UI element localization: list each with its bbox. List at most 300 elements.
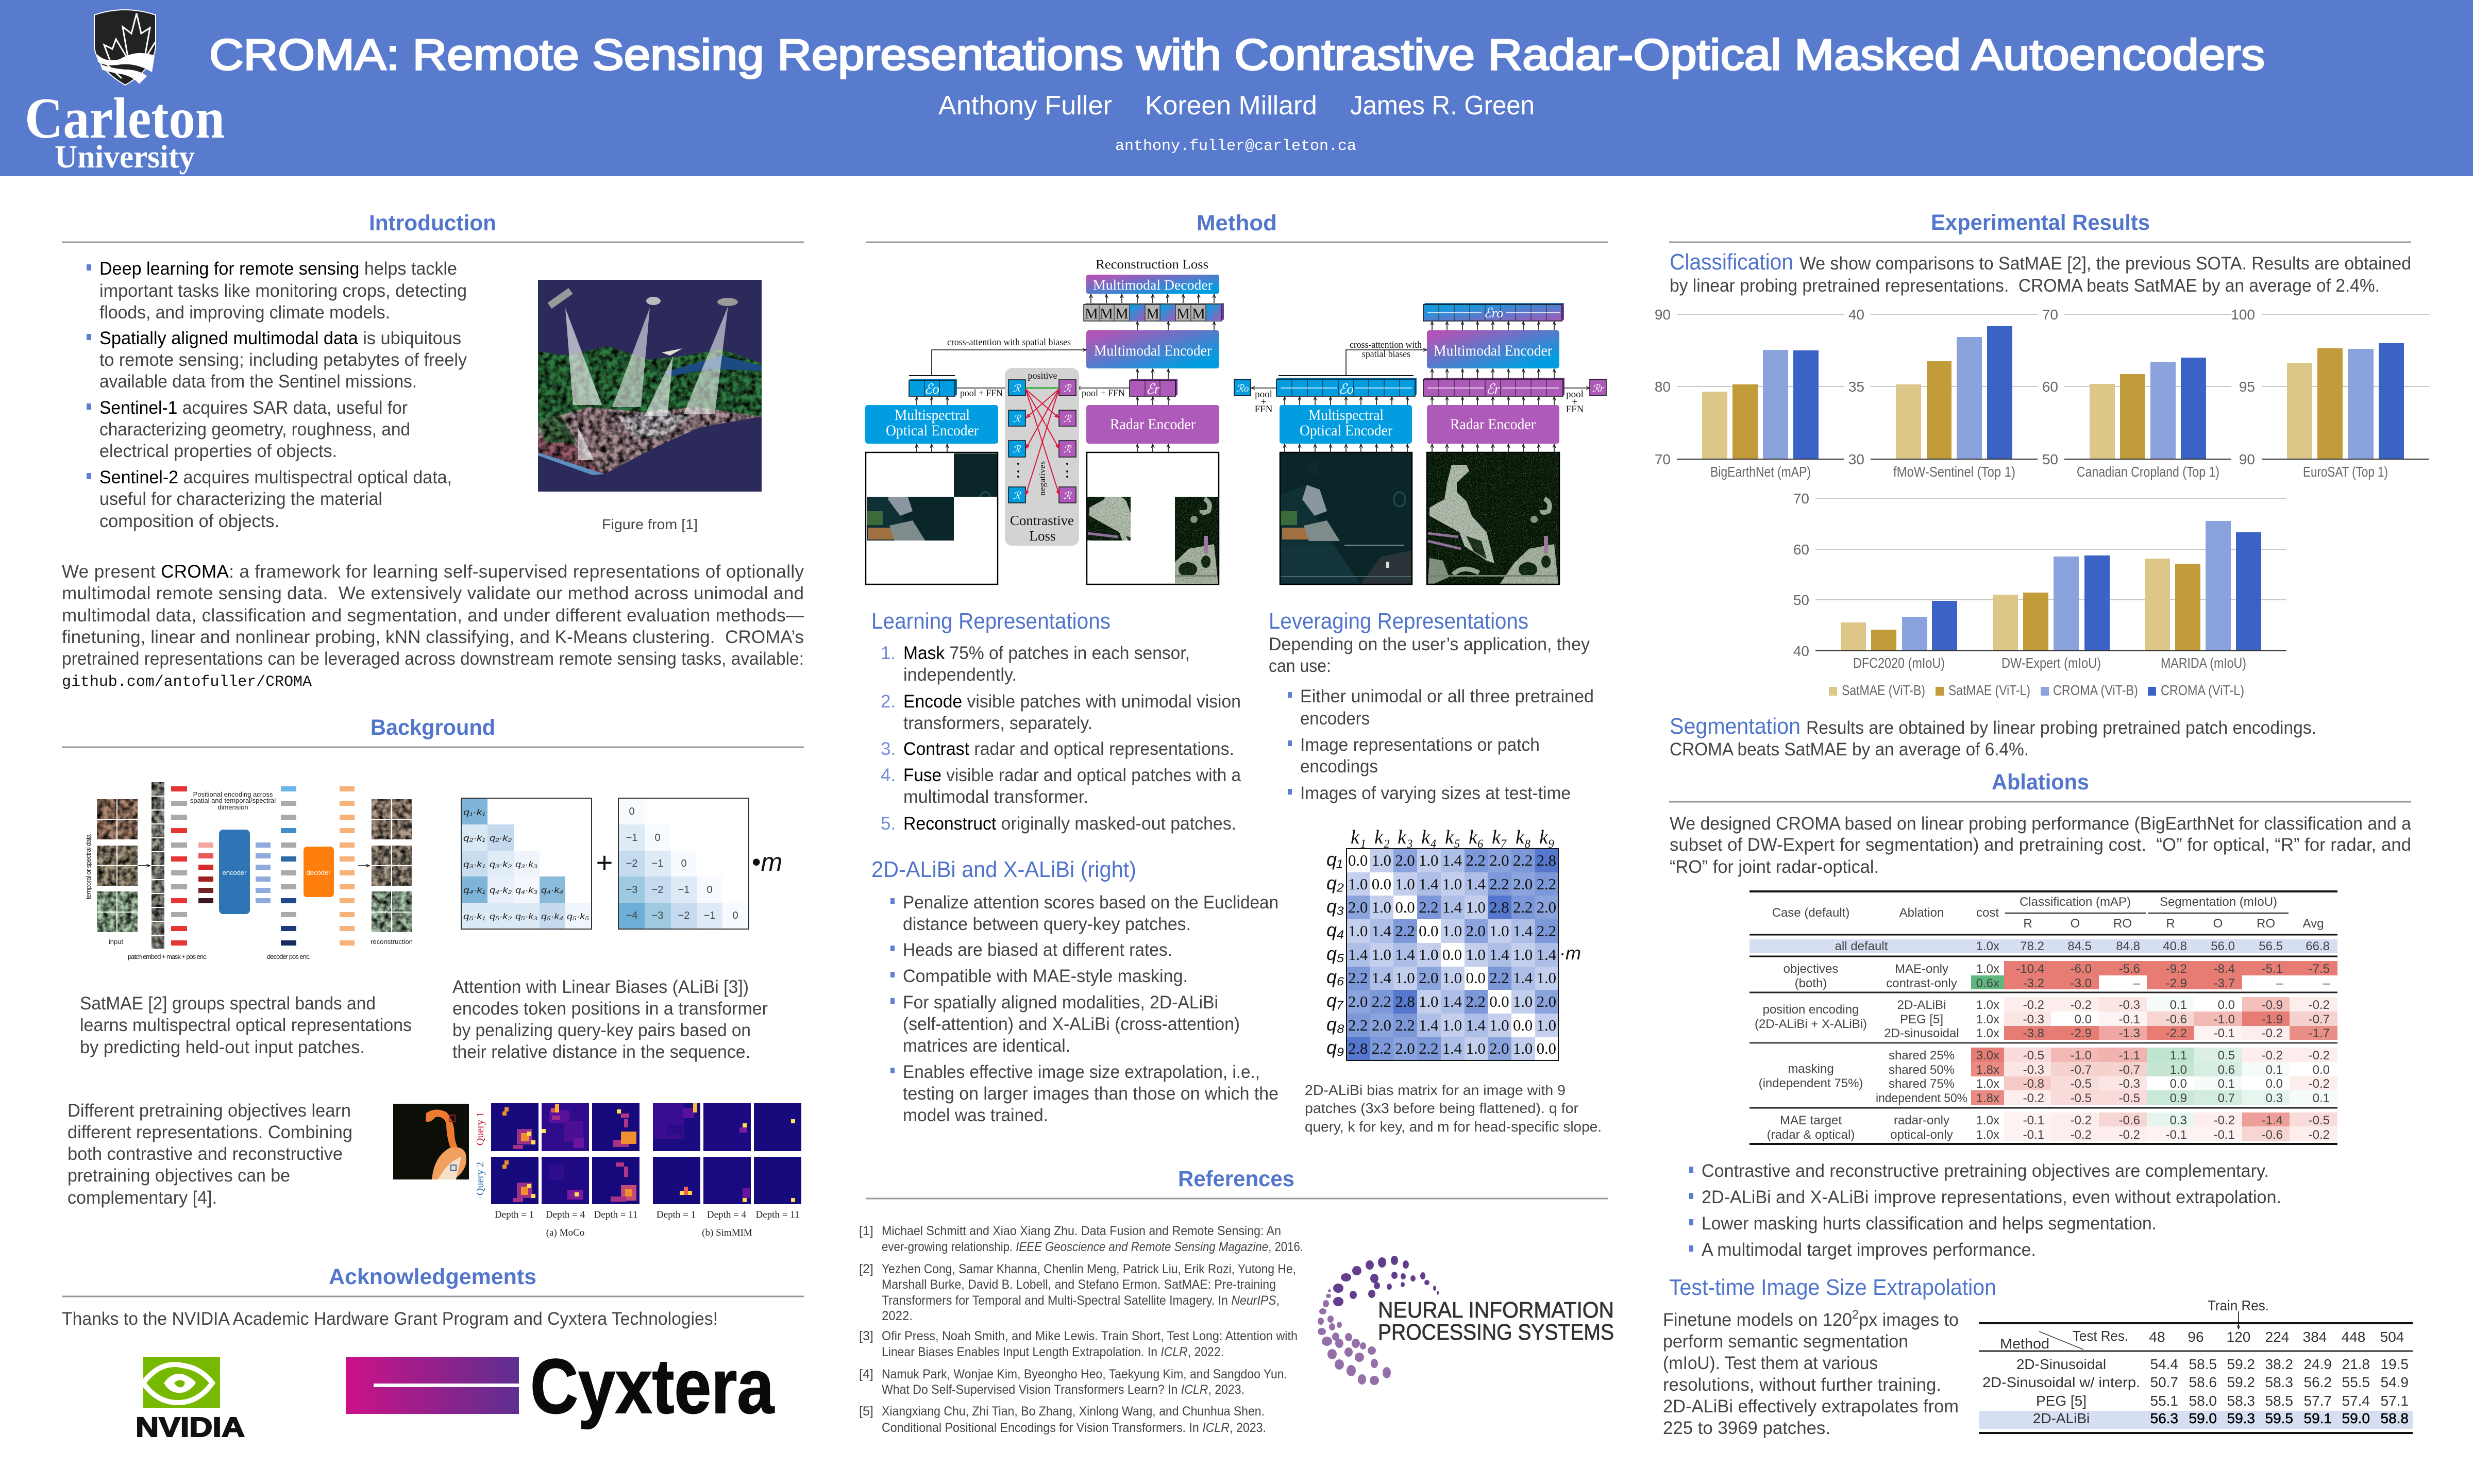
matrix: 2D-ALiBi bias: q₁	[1326, 849, 1342, 870]
text: pretraining objectives: both contrastive and reconstructive	[68, 1144, 343, 1164]
rows: objectives: -7.5	[2309, 962, 2330, 976]
figure: SatMAE architecture: patch embed + mask + pos enc.	[128, 953, 208, 960]
image: flamingo	[393, 1104, 469, 1179]
tokens: masked sequence: M	[1100, 306, 1113, 322]
table: image size extrapolation: 504	[2380, 1329, 2404, 1345]
bullet list: intro: available data from the Sentinel missions.	[99, 372, 417, 392]
chart: fMoW-Sentinel: fMoW-Sentinel (Top 1)	[1893, 464, 2015, 480]
table header: Classification (mAP)	[2020, 895, 2131, 909]
caption: bias matrix: 2D-ALiBi bias matrix for an image with 9	[1305, 1082, 1566, 1098]
numbered list: Fuse visible radar and optical patches with a	[903, 765, 1241, 785]
heading: Acknowledgements: Acknowledgements	[329, 1264, 536, 1289]
table: image size extrapolation: 57.4	[2342, 1393, 2370, 1409]
connector: cross attention right	[1346, 350, 1427, 376]
table: image size extrapolation: 59.0	[2342, 1410, 2370, 1426]
rows: masking: 0.1	[2266, 1063, 2283, 1077]
figure: SatMAE architecture: temporal or spectral data	[85, 834, 92, 899]
matrix: query key scores: q₁·k₁	[463, 807, 485, 817]
bullet list: leveraging: Images of varying sizes at test-time	[1300, 783, 1571, 803]
rows: MAE target: -1.4	[2262, 1114, 2283, 1127]
row: all default	[1749, 939, 2337, 956]
matrix: 2D-ALiBi bias: 2.0 2.2 2.8 1.0 1.4 2.2 0.0 1.0 2.0	[1348, 992, 1556, 1010]
chart: BigEarthNet: 90	[1655, 307, 1671, 323]
bullet list: intro: composition of objects.	[99, 511, 279, 531]
rows: position encoding: -0.3	[2023, 1013, 2044, 1026]
reference list: Michael Schmitt and Xiao Xiang Zhu. Data Fusion and Remote Sensing: An	[882, 1224, 1281, 1238]
heading: learning representations: Learning Representations	[871, 609, 1111, 634]
rows: position encoding: -2.9	[2071, 1026, 2092, 1040]
box: multimodal decoder: Multimodal Decoder	[1093, 277, 1213, 293]
rows: position encoding: -3.8	[2023, 1026, 2044, 1040]
box: multispectral encoder left	[865, 405, 998, 444]
table: image size extrapolation: 50.7	[2150, 1374, 2178, 1390]
token: R_R output	[1590, 379, 1606, 396]
matrix: relative distance: −1	[678, 884, 689, 896]
label: cross attention right	[1350, 340, 1422, 360]
table header: RO	[2257, 917, 2275, 931]
panel: references	[859, 1167, 1614, 1435]
bullet list: ALiBi	[890, 892, 1278, 1125]
box: multispectral encoder right: Multispectral	[1308, 407, 1384, 424]
bullet list: intro: to remote sensing; including petabytes of freely	[99, 350, 467, 370]
text: ALiBi description: their relative distance in the sequence.	[452, 1042, 750, 1062]
header banner	[0, 0, 2473, 176]
text: segmentation: Segmentation	[1670, 714, 1801, 739]
matrix: query key scores: q₂·k₂	[490, 833, 512, 843]
image: full optical	[1280, 452, 1412, 584]
bullet list: intro: Sentinel-2 acquires multispectral optical data,	[99, 467, 452, 487]
text block: leveraging representations	[1269, 609, 1594, 803]
figure: SatMAE architecture: Positional encoding across	[193, 790, 273, 798]
tokens: masked sequence: M	[1176, 306, 1190, 322]
rows: objectives	[1749, 961, 2337, 992]
text: pretraining objectives: Different pretraining objectives learn	[68, 1101, 351, 1121]
rows: masking: -1.0	[2071, 1049, 2092, 1063]
rows: MAE target: radar-only	[1894, 1114, 1949, 1127]
reference list: Transformers for Temporal and Multi-Spectral Satellite Imagery. In NeurIPS,	[882, 1293, 1280, 1308]
rows: masking: -0.3	[2119, 1077, 2140, 1091]
matrix: relative distance: −1	[652, 858, 663, 869]
email: anthony.fuller@carleton.ca	[1115, 138, 1356, 155]
rows: masking: 0.9	[2170, 1091, 2187, 1105]
table: image size extrapolation: 59.2	[2227, 1374, 2255, 1390]
caption: bias matrix: query, k for key, and m for head-specific slope.	[1305, 1119, 1602, 1135]
bullet list: intro: Sentinel-1 acquires SAR data, useful for	[99, 398, 408, 418]
panel: contrastive loss: ℛ	[1013, 491, 1021, 501]
tokens: masked sequence: M	[1192, 306, 1205, 322]
rows: position encoding: -1.9	[2262, 1013, 2283, 1026]
chart: fMoW-Sentinel	[1848, 307, 2038, 480]
tokens: masked sequence: M	[1085, 306, 1098, 322]
matrix: 2D-ALiBi bias: k₅	[1445, 827, 1460, 848]
rows: position encoding: 1.0x	[1976, 998, 1999, 1012]
chart: segmentation: 50	[1793, 592, 1809, 608]
matrix: 2D-ALiBi bias: k₄	[1421, 827, 1437, 848]
matrix: 2D-ALiBi bias: 2.2 1.4 1.0 2.0 1.0 0.0 2.2 1.4 1.0	[1348, 969, 1556, 987]
chart: BigEarthNet	[1655, 307, 1844, 480]
rows: masking: -0.2	[2309, 1049, 2330, 1063]
chart: fMoW-Sentinel: 30	[1848, 451, 1864, 467]
matrix: 2D-ALiBi bias: q₄	[1326, 919, 1344, 940]
label: query 2: Query 2	[475, 1162, 486, 1195]
university wordmark: Carleton	[25, 87, 225, 150]
rows: objectives: -5.1	[2262, 962, 2283, 976]
reference list: [5]	[859, 1404, 873, 1419]
rows: position encoding: -2.2	[2166, 1026, 2187, 1040]
tokens: masked sequence: M	[1115, 306, 1129, 322]
connector: cross attention left	[932, 350, 1086, 376]
text: extrapolation description: (mIoU). Test them at various	[1663, 1353, 1878, 1373]
table: image size extrapolation	[1979, 1297, 2413, 1433]
rows: objectives: contrast-only	[1886, 976, 1957, 990]
token: R_R output: ℛr	[1592, 383, 1604, 394]
logo: NeurIPS: NEURAL INFORMATION	[1378, 1297, 1614, 1323]
rows: position encoding: (2D-ALiBi + X-ALiBi)	[1755, 1017, 1867, 1031]
matrix: 2D-ALiBi bias: 1.0 0.0 1.0 1.4 1.0 1.4 2.2 2.0 2.2	[1348, 875, 1556, 893]
table: image size extrapolation: 59.3	[2227, 1410, 2255, 1426]
text: ablations intro	[1670, 814, 2412, 877]
bullet list: ALiBi: For spatially aligned modalities, 2D-ALiBi	[903, 992, 1218, 1013]
rows: masking: 1.1	[2170, 1049, 2187, 1063]
text block: leveraging representations: Depending on the user’s application, they	[1269, 634, 1590, 654]
label: cross attention left: cross-attention with spatial biases	[947, 337, 1071, 348]
numbered list: 5.	[881, 814, 896, 834]
numbered list: 2.	[881, 692, 896, 712]
rows: masking: 3.0x	[1976, 1049, 1999, 1063]
table header: R	[2166, 917, 2175, 931]
diagram: CROMA pretraining	[865, 258, 1224, 584]
rows: position encoding	[1749, 997, 2337, 1043]
matrix: query key scores: q₃·k₂	[490, 859, 512, 869]
table: image size extrapolation: 58.5	[2189, 1356, 2217, 1372]
label: pool FFN stacked right	[1566, 389, 1584, 415]
legend: CROMA (ViT-B)	[2053, 682, 2138, 698]
matrix: query key scores: q₅·k₃	[515, 912, 537, 921]
tokens: E_R small	[1130, 379, 1177, 397]
bullet list: ALiBi: Penalize attention scores based on the Euclidean	[903, 892, 1278, 913]
table header: Ablation	[1899, 906, 1944, 920]
box: multispectral encoder right: Optical Encoder	[1300, 422, 1392, 439]
numbered list	[881, 643, 1241, 834]
chart: Canadian Cropland: 50	[2042, 451, 2058, 467]
matrix: 2D-ALiBi bias: 0.0 1.0 2.0 1.0 1.4 2.2 2.0 2.2 2.8	[1348, 851, 1556, 869]
labels: depth captions: Depth = 4	[707, 1209, 747, 1220]
bullet list: intro: Spatially aligned multimodal data is ubiquitous	[99, 328, 461, 348]
arrows: decoder inputs	[1091, 294, 1214, 330]
table: ablations	[1749, 891, 2337, 1144]
heading: leveraging representations: Leveraging Representations	[1269, 609, 1528, 634]
rows: objectives: 1.0x	[1976, 962, 1999, 976]
rows: MAE target: optical-only	[1890, 1128, 1953, 1142]
matrix: 2D-ALiBi bias: q₉	[1326, 1037, 1344, 1058]
rows: MAE target: -0.1	[2023, 1114, 2044, 1127]
token: R_O output	[1234, 379, 1251, 396]
rows: objectives: objectives	[1784, 962, 1838, 976]
rows: MAE target: -0.2	[2214, 1114, 2235, 1127]
rows: objectives: -3.7	[2214, 976, 2235, 990]
rows: MAE target: -0.1	[2214, 1128, 2235, 1142]
rows: masking: 0.6	[2218, 1063, 2235, 1077]
bullet list: ALiBi: Heads are biased at different rates.	[903, 940, 1172, 960]
table: image size extrapolation: 19.5	[2381, 1356, 2409, 1372]
rows: objectives: -2.9	[2166, 976, 2187, 990]
bullet list: ALiBi: (self-attention) and X-ALiBi (cross-attention)	[903, 1014, 1240, 1034]
table: image size extrapolation: Test Res.	[2073, 1328, 2128, 1344]
box: radar encoder left: Radar Encoder	[1110, 416, 1196, 433]
logo: NVIDIA: NVIDIA	[136, 1412, 245, 1443]
panel: contrastive loss	[1005, 368, 1079, 546]
reference list: Namuk Park, Wonjae Kim, Byeongho Heo, Taekyung Kim, and Sangdoo Yun.	[882, 1367, 1287, 1381]
matrix: 2D-ALiBi bias: q₆	[1326, 966, 1344, 987]
matrix: relative distance: −1	[704, 910, 715, 921]
text: ALiBi description: Attention with Linear Biases (ALiBi [3])	[452, 977, 749, 997]
symbol: plus: +	[596, 846, 613, 879]
panel: introduction	[62, 211, 804, 691]
reference list: [4]	[859, 1367, 873, 1381]
bullet list: ablation findings: 2D-ALiBi and X-ALiBi improve representations, even without extrapolation.	[1702, 1187, 2281, 1207]
matrix: relative distance: 0	[654, 832, 661, 844]
table: image size extrapolation: 384	[2303, 1329, 2327, 1345]
heading: Introduction: Introduction	[369, 211, 496, 235]
bullet list: ALiBi: testing on larger images than those on which the	[903, 1084, 1278, 1104]
matrix: query key scores: q₄·k₄	[541, 885, 563, 895]
legend: CROMA (ViT-L)	[2161, 682, 2244, 698]
arrow: train res	[2238, 1311, 2239, 1329]
image: satellites over island	[538, 280, 762, 492]
text: ablations intro: “RO” for joint radar-optical.	[1670, 857, 1879, 877]
logo: Cyxtera: Cyxtera	[530, 1343, 775, 1429]
tokens: E_RO: ℰro	[1484, 306, 1503, 321]
paragraph: we present CROMA: multimodal remote sensing data. We extensively validate our method across unimodal and	[62, 583, 804, 603]
heading: Ablations: Ablations	[1992, 770, 2089, 795]
heading: test-time image size extrapolation: Test-time Image Size Extrapolation	[1669, 1275, 1996, 1300]
logo: Cyxtera	[346, 1343, 775, 1429]
panel: contrastive loss: ℛ	[1063, 444, 1072, 455]
matrix: 2D-ALiBi bias: k₃	[1398, 827, 1413, 848]
bullet list: ALiBi: Enables effective image size extrapolation, i.e.,	[903, 1062, 1260, 1082]
labels: depth captions: Depth = 11	[594, 1209, 637, 1220]
rows: position encoding: 2D-ALiBi	[1897, 998, 1946, 1012]
image: full radar	[1427, 452, 1559, 584]
image: masked optical	[866, 452, 998, 584]
table: image size extrapolation: 57.1	[2381, 1393, 2409, 1409]
figure: SatMAE architecture: spatial and temporal/spectral	[190, 797, 276, 804]
rows: objectives: –	[2133, 976, 2141, 990]
rows: masking: -0.5	[2071, 1077, 2092, 1091]
label: reconstruction loss: Reconstruction Loss	[1096, 258, 1208, 272]
rows: position encoding: -1.3	[2119, 1026, 2140, 1040]
figure: ALiBi matrices	[461, 798, 782, 929]
rows: MAE target: -0.5	[2309, 1114, 2330, 1127]
table: image size extrapolation: 59.5	[2265, 1410, 2293, 1426]
paragraph: we present CROMA: multimodal data, classification and segmentation, and under different evaluation methods—	[62, 605, 804, 626]
heading: Background: Background	[371, 715, 495, 740]
text block: learning representations	[871, 609, 1241, 834]
heading: Method: Method	[1197, 211, 1277, 235]
matrix: 2D-ALiBi bias: 2.0 1.0 0.0 2.2 1.4 1.0 2.8 2.2 2.0	[1348, 898, 1556, 916]
text: extrapolation description: Finetune models on 120	[1663, 1310, 1857, 1330]
text block: leveraging representations: can use:	[1269, 656, 1331, 676]
chart: BigEarthNet: BigEarthNet (mAP)	[1710, 464, 1811, 480]
chart: fMoW-Sentinel: 35	[1848, 379, 1864, 395]
rows: objectives: -5.6	[2119, 962, 2140, 976]
reference list: [2]	[859, 1262, 873, 1276]
labels: depth captions	[495, 1209, 799, 1238]
numbered list: 1.	[881, 643, 896, 663]
rows: position encoding: -0.3	[2119, 998, 2140, 1012]
table header: cost	[1976, 906, 1999, 920]
matrix: relative distance: −3	[626, 884, 637, 896]
box: multimodal encoder left	[1086, 330, 1219, 368]
rows: MAE target: MAE target	[1780, 1114, 1842, 1127]
table: image size extrapolation: 58.8	[2381, 1410, 2409, 1426]
table header: Avg	[2303, 917, 2324, 931]
table header: Segmentation (mIoU)	[2160, 895, 2277, 909]
numbered list: 3.	[881, 739, 896, 759]
numbered list: Reconstruct originally masked-out patches.	[903, 814, 1236, 834]
bullet list: intro: floods, and improving climate models.	[99, 302, 390, 323]
matrix: 2D-ALiBi bias: q₃	[1326, 896, 1344, 917]
matrix: 2D-ALiBi bias: q₅	[1326, 943, 1344, 964]
heading: 2D-ALiBi and X-ALiBi: 2D-ALiBi and X-ALiBi (right)	[871, 857, 1136, 882]
row: all default: 66.8	[2306, 939, 2330, 953]
matrix: relative distance: −2	[652, 884, 663, 896]
university wordmark	[25, 87, 225, 175]
label: cross attention right: spatial biases	[1362, 349, 1410, 360]
reference list: [3]	[859, 1329, 873, 1343]
rows: MAE target: 1.0x	[1976, 1114, 1999, 1127]
rows: masking: 0.0	[2266, 1077, 2283, 1091]
matrix: 2D-ALiBi bias: 1.0 1.4 2.2 0.0 1.0 2.0 1.0 1.4 2.2	[1348, 922, 1556, 940]
chart: Canadian Cropland	[2042, 307, 2231, 480]
rows: MAE target: -0.2	[2071, 1128, 2092, 1142]
panel: test-time extrapolation	[1663, 1275, 2413, 1438]
table: image size extrapolation: 56.3	[2150, 1410, 2178, 1426]
table header: O	[2213, 917, 2223, 931]
text: extrapolation description	[1663, 1308, 1959, 1438]
rows: MAE target: -0.1	[2023, 1128, 2044, 1142]
rows: masking: 0.1	[2313, 1091, 2330, 1105]
bullet list: ablation findings: A multimodal target improves performance.	[1702, 1240, 2036, 1260]
rows: objectives: -8.4	[2214, 962, 2235, 976]
text: pretraining objectives: different representations. Combining	[68, 1122, 352, 1142]
rows: objectives: MAE-only	[1895, 962, 1948, 976]
text: SatMAE description: learns multispectral optical representations	[80, 1015, 412, 1035]
text: extrapolation description: px images to	[1859, 1310, 1959, 1330]
matrix: relative distance: 0	[732, 910, 738, 921]
rows: position encoding: -0.2	[2023, 998, 2044, 1012]
bullet list: intro	[87, 259, 467, 531]
table header: Case (default)	[1772, 906, 1849, 920]
rows: position encoding: -0.1	[2214, 1026, 2235, 1040]
panel: background	[62, 715, 804, 1238]
numbered list: Contrast radar and optical representations.	[903, 739, 1234, 759]
bullet list: leveraging: Image representations or patch	[1300, 735, 1540, 755]
token: R_O output: ℛo	[1236, 383, 1249, 394]
table: image size extrapolation: 55.1	[2150, 1393, 2178, 1409]
text: SatMAE description	[80, 993, 412, 1057]
table: image size extrapolation: 48	[2149, 1329, 2165, 1345]
label: pool FFN stacked left	[1255, 389, 1273, 415]
rows: masking: shared 50%	[1889, 1063, 1955, 1077]
rows: position encoding: 0.0	[2218, 998, 2235, 1012]
rows: masking: masking	[1788, 1062, 1834, 1076]
text: segmentation: Results are obtained by linear probing pretrained patch encodings.	[1806, 718, 2316, 738]
matrix: 2D-ALiBi bias: k₉	[1539, 827, 1555, 848]
rows: masking: 0.0	[2170, 1077, 2187, 1091]
rows: MAE target: -0.6	[2262, 1128, 2283, 1142]
rows: masking: -0.3	[2023, 1063, 2044, 1077]
diagram: CROMA downstream	[1234, 303, 1606, 584]
matrix: query key scores: q₅·k₄	[541, 912, 563, 921]
bullet list: leveraging: encoders	[1300, 709, 1370, 729]
chart: segmentation	[1793, 491, 2286, 671]
text: SatMAE description: SatMAE [2] groups spectral bands and	[80, 993, 376, 1014]
rows: position encoding: -0.9	[2262, 998, 2283, 1012]
table: image size extrapolation: 59.0	[2189, 1410, 2217, 1426]
rows: MAE target: -0.2	[2071, 1114, 2092, 1127]
authors: Anthony Fuller	[938, 91, 1112, 121]
bullet list: ablation findings	[1689, 1161, 2281, 1260]
matrix: query key scores: q₄·k₁	[463, 885, 485, 895]
reference list: Conditional Positional Encodings for Vision Transformers. In ICLR, 2023.	[882, 1421, 1266, 1435]
numbered list: Encode visible patches with unimodal vision	[903, 692, 1241, 712]
bullet list: intro: important tasks like monitoring crops, detecting	[99, 281, 467, 301]
numbered list: multimodal transformer.	[903, 787, 1088, 807]
table header	[1749, 891, 2337, 935]
table: image size extrapolation: 58.5	[2265, 1393, 2293, 1409]
paragraph: we present CROMA: github.com/antofuller/CROMA	[62, 673, 312, 691]
rows: MAE target: -0.1	[2166, 1128, 2187, 1142]
rows: masking: 1.8x	[1976, 1063, 1999, 1077]
rows: masking: shared 75%	[1889, 1077, 1955, 1091]
table: image size extrapolation: 120	[2227, 1329, 2250, 1345]
reference list: Linear Biases Enables Input Length Extrapolation. In ICLR, 2022.	[882, 1345, 1224, 1359]
matrix: query key scores: q₅·k₁	[463, 912, 485, 921]
label: cross attention right: cross-attention with	[1350, 340, 1422, 350]
legend: SatMAE (ViT-L)	[1948, 682, 2030, 698]
rows: objectives: (both)	[1795, 976, 1827, 990]
caption: bias matrix: patches (3x3 before being flattened). q for	[1305, 1100, 1578, 1116]
matrix: relative distance: 0	[629, 806, 635, 817]
panel: contrastive loss: negatives	[1037, 461, 1047, 496]
text: pretraining objectives	[68, 1101, 352, 1208]
box: multispectral encoder left: Optical Encoder	[886, 422, 979, 439]
panel: ablations	[1669, 770, 2412, 1260]
reference list: 2022.	[882, 1309, 913, 1323]
bullet list: intro: characterizing geometry, roughness, and	[99, 419, 410, 440]
text: classification	[1670, 249, 2411, 296]
tokens: E_R row: ℰr	[1486, 381, 1500, 397]
figure: SatMAE architecture: encoder	[223, 869, 247, 876]
table: image size extrapolation: 448	[2342, 1329, 2365, 1345]
rows: position encoding: -0.7	[2309, 1013, 2330, 1026]
matrix: 2D-ALiBi bias: q₂	[1326, 872, 1344, 893]
matrix: 2D-ALiBi bias: 1.4 1.0 1.4 1.0 0.0 1.0 1.4 1.0 1.4	[1348, 946, 1556, 964]
table: image size extrapolation: 58.6	[2189, 1374, 2217, 1390]
label: pool FFN stacked right: FFN	[1566, 404, 1584, 415]
rows: position encoding: 0.0	[2075, 1013, 2092, 1026]
chart: EuroSAT: EuroSAT (Top 1)	[2303, 464, 2388, 480]
tokens: E_R row	[1423, 378, 1564, 397]
bullet list: ALiBi: Compatible with MAE-style masking.	[903, 966, 1188, 986]
figure: SatMAE architecture: decoder	[307, 869, 331, 876]
matrix: 2D-ALiBi bias: ·m	[1559, 942, 1581, 964]
table: image size extrapolation: 58.0	[2189, 1393, 2217, 1409]
box: radar encoder right	[1427, 405, 1559, 444]
matrix: query key scores: q₃·k₁	[463, 859, 485, 869]
matrix: 2D-ALiBi bias: k₁	[1351, 827, 1366, 848]
